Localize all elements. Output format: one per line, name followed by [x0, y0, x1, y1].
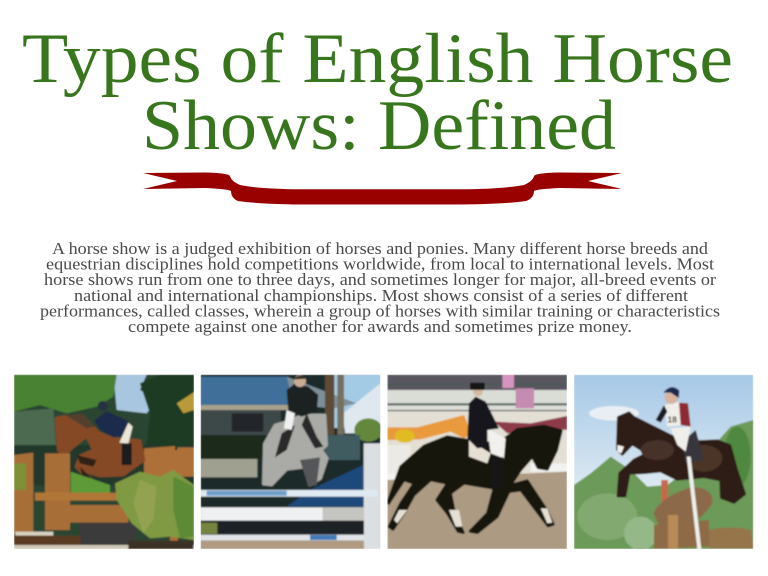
intro paragraph: performances, called classes, wherein a group of horses with similar training or characteristics	[40, 302, 720, 320]
photo: cross-country rider jumping log	[574, 375, 753, 550]
intro paragraph: national and international championships. Most shows consist of a series of different	[74, 286, 688, 305]
photo: hunter horse jumping over wooden fence	[14, 375, 194, 549]
title	[22, 20, 733, 165]
intro paragraph: equestrian disciplines hold competitions worldwide, from local to international levels. Most	[46, 254, 714, 274]
photo: cross-country rider jumping log: 18	[667, 414, 677, 424]
intro paragraph	[40, 239, 720, 336]
photo: dressage rider on black horse	[387, 375, 567, 549]
title: Types of English Horse	[22, 20, 733, 98]
title: Shows: Defined	[142, 87, 616, 165]
red ribbon banner	[143, 172, 622, 204]
photo: grey horse jumping striped show rails	[201, 375, 382, 549]
intro paragraph: horse shows run from one to three days, and sometimes longer for major, all-breed events or	[44, 270, 717, 289]
intro paragraph: compete against one another for awards and sometimes prize money.	[128, 317, 632, 336]
intro paragraph: A horse show is a judged exhibition of horses and ponies. Many different horse breeds and	[52, 239, 709, 258]
